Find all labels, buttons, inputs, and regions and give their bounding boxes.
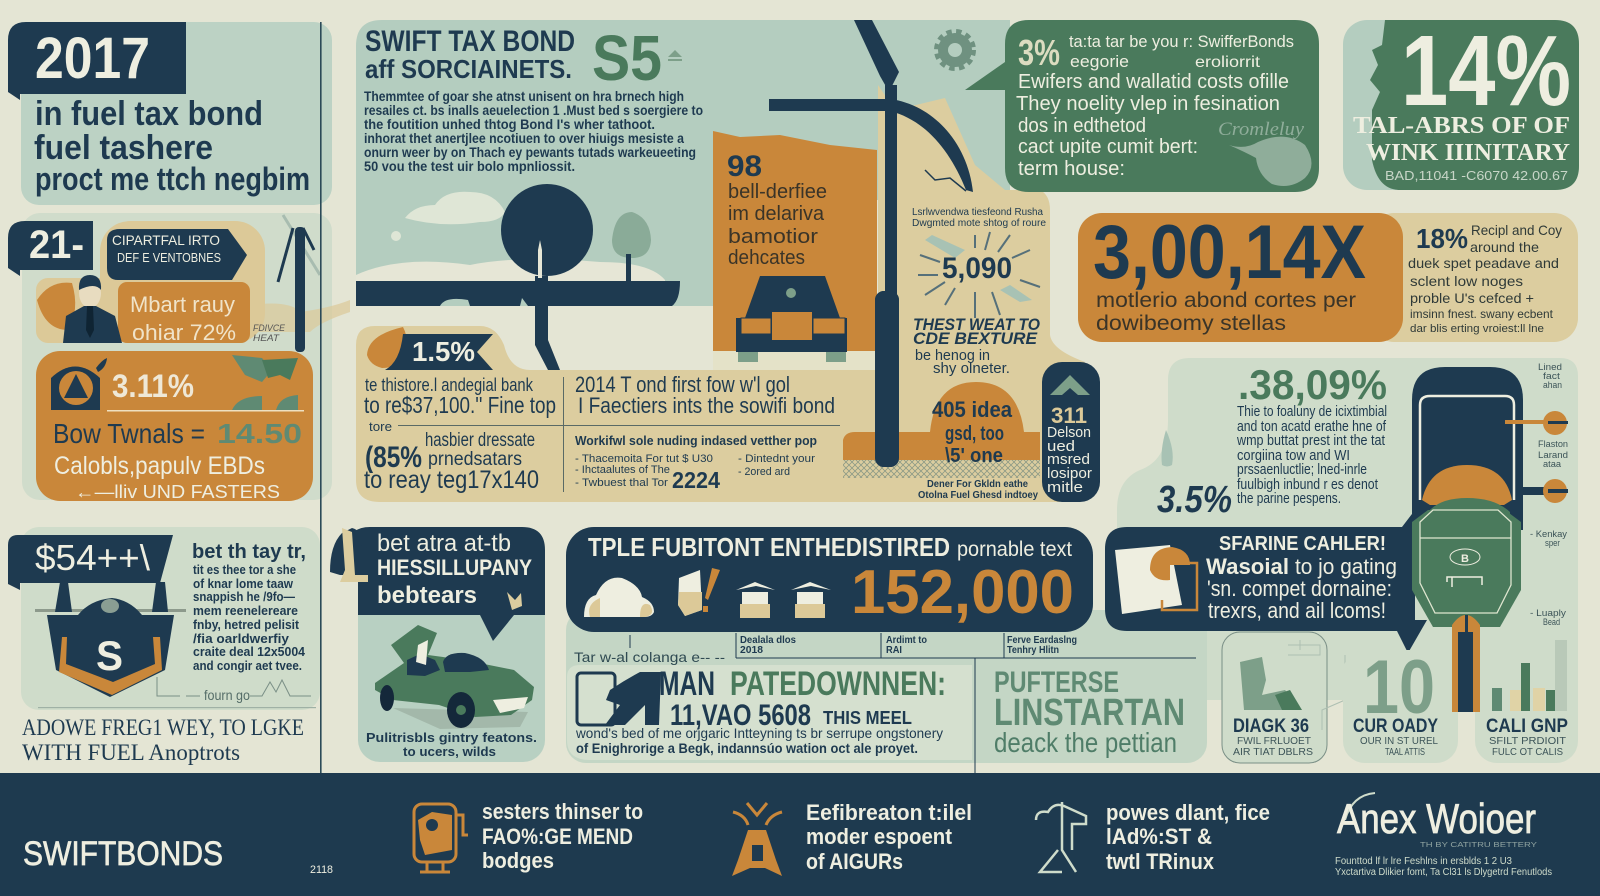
text: left finance copy: prnedsatars (428, 449, 522, 470)
text: mitle (1047, 479, 1083, 496)
caption: to ucers, wilds (403, 744, 496, 759)
text: WINK IIINITARY (1366, 140, 1570, 166)
text (1236, 403, 1387, 507)
stat box: 72% (118, 282, 250, 345)
tag: $54: $54++\ (35, 537, 150, 578)
panel: 14% stat: BAD,11041 -C6070 42.00.67 (1385, 168, 1568, 183)
card: Diagk 36 (1222, 632, 1345, 763)
panel: 3.11% orange (36, 351, 313, 502)
icon: tan hook (330, 528, 368, 575)
text: SFARINE CAHLER! (1219, 533, 1386, 555)
heading: THIS MEEL (823, 708, 912, 728)
panel: timeline labels (574, 633, 1196, 773)
body text: Themmtee of goar she atnst unisent on hra brnech high (364, 89, 684, 104)
text: feature three: powes dlant, fice (1106, 800, 1270, 825)
text: TAL-ABRS OF OF (1353, 113, 1570, 139)
headline text: fuel tashere (34, 129, 213, 167)
panel: starburst stat: Dwgmted mote shtog of roure (912, 218, 1046, 229)
icon: shield badge: S (96, 632, 123, 679)
text: cact upite cumit bert: (1018, 136, 1198, 158)
label: RAI: RAI (886, 645, 902, 656)
label: small note: HEAT (253, 333, 281, 343)
device labels: - Kenkay (1530, 529, 1568, 539)
text: feature one: bodges (482, 848, 554, 873)
illustration: tree landscape (356, 184, 680, 370)
icon: map shapes (232, 355, 298, 410)
icon: vintage car (375, 625, 534, 729)
heading: HIESSILLUPANY (377, 555, 532, 580)
icon: crest (732, 803, 782, 876)
text: footer credit (1335, 856, 1552, 878)
text: card copy: bamotior (728, 226, 818, 248)
caption (918, 479, 1038, 501)
sparkline: fourn go (204, 687, 250, 703)
body text: of knar lome taaw (193, 576, 294, 591)
panel: starburst stat (912, 207, 1046, 377)
card: Cali GNP (1475, 640, 1578, 763)
text: right finance copy: I Faectiers ints the sowifi bond (578, 393, 835, 418)
label: small note (253, 323, 286, 343)
stat: 3.5%: 3.5% (1157, 479, 1232, 521)
heading: bet atra at-tb (377, 530, 511, 557)
text: footer credit: Founttod lf lr lre Feshlns in ersblds 1 2 U3 (1335, 856, 1512, 867)
text: ta:ta tar be you r: SwifferBonds (1069, 32, 1294, 51)
body text: onurn weer by on Thach ey pewants tutads warkeueeting (364, 145, 696, 160)
heading: 11,VAO 5608 (670, 699, 811, 732)
text: heading and caption: CDE BEXTURE (913, 329, 1038, 348)
text: footer credit: Yxctartiva Dlikier fomt, Ta Cl31 ls Dlygetrd Fenutlods (1335, 867, 1552, 878)
body text: craite deal 12x5004 (193, 644, 306, 659)
body text (364, 89, 703, 174)
text: losipor (1047, 465, 1092, 482)
text: dome figures: \5' one (945, 445, 1003, 467)
device labels: sper (1545, 538, 1560, 548)
label: 2018 (740, 635, 796, 656)
card: 10 Cur Oady (1343, 645, 1458, 763)
text: heading and caption: be henog in (915, 347, 990, 364)
icon: recycle badge (51, 358, 107, 410)
label: small note: FDIVCE (253, 323, 286, 333)
text: Delson (1047, 424, 1091, 441)
stat block: 38,09% (1157, 361, 1387, 521)
label: terms: Tenhry Hlitn (1007, 645, 1059, 656)
text: right finance copy: 2014 T ond first fow w'l gol (575, 372, 790, 397)
card: Diagk 36: FWIL FRLUOET (1237, 736, 1311, 747)
caption: Dener For Gkldn eathe (927, 479, 1028, 490)
tag: $54 (8, 535, 173, 590)
text: to jo gating (1295, 554, 1397, 579)
text: orange panel copy: 14.50 (217, 418, 302, 449)
heading: bet th tay tr, (192, 541, 306, 563)
logo: Anex Woioer: Anex Woioer (1337, 795, 1536, 842)
caption: Otolna Fuel Ghesd indtoey (918, 490, 1038, 501)
text: orange panel copy: Calobls,papulv EBDs (54, 452, 265, 480)
body text: 50 vou the test uir bolo mpnliossit. (364, 159, 575, 174)
text: feature three (1106, 800, 1270, 874)
panel: man patedownnen (567, 665, 972, 760)
text: term house: (1018, 158, 1125, 180)
stat: 10: 10 (1363, 645, 1435, 730)
bar chart (1492, 640, 1567, 711)
card: Cali GNP: FULC OT CALIS (1492, 747, 1563, 758)
panel: $54 badge (8, 527, 320, 710)
footer (0, 773, 1600, 896)
logo: crowd mark: Cromleluy (1218, 119, 1305, 140)
text: orange panel copy: Bow Twnals = (53, 418, 205, 449)
icons: cloud, cup, caps (584, 568, 831, 618)
text: right finance copy: - Thacemoita For tut $ U30 (575, 453, 713, 465)
logo: crowd mark (1218, 119, 1312, 186)
stat: 3%: 3% (1018, 32, 1060, 73)
card: 10 Cur Oady: OUR IN ST UREL (1360, 736, 1438, 747)
label: 2018: 2018 (740, 645, 763, 656)
icon: turbine outline (1036, 802, 1086, 872)
icon: businessman with bag (37, 275, 122, 343)
body text: tit es thee tor a she (193, 562, 296, 577)
body text: the foutition unhed thtog Bond I's wher tathoot. (364, 117, 655, 132)
connector: orange gauge (1505, 411, 1568, 435)
brand: SwiftBonds: SWIFTBONDS (23, 835, 223, 873)
icon: car front (736, 276, 847, 362)
caption (366, 730, 537, 759)
device labels: Bead (1543, 617, 1560, 627)
device labels: - Luaply (1530, 608, 1567, 618)
text: heading and caption: shy olneter. (933, 360, 1010, 377)
body text: /fia oarldwerfiy (193, 631, 290, 646)
text: corgiina tow and WI (1237, 447, 1350, 464)
label: RAI: Ardimt to (886, 635, 927, 646)
text: feature two: of AIGURs (806, 849, 903, 874)
heading: SWIFT TAX BOND (365, 25, 575, 58)
label: terms: Ferve Eardaslng (1007, 635, 1077, 646)
stat: 5,090: 5,090 (942, 252, 1012, 285)
panel: tan hill behind turbine (878, 85, 1085, 502)
text (1016, 32, 1294, 180)
panel: 3,00,14X stat (1078, 210, 1578, 342)
text: card copy: im delariva (728, 203, 825, 225)
headline text: in fuel tax bond (35, 95, 263, 133)
text: feature three: lAd%:ST & (1106, 824, 1212, 849)
illustration: fuel device (1412, 362, 1568, 712)
year 2017: 2017 (35, 26, 150, 91)
icon: shield badge (35, 582, 186, 697)
text: motlerio abond cortes per (1096, 289, 1356, 312)
panel: 14% stat (1343, 15, 1579, 190)
text: left finance copy: hasbier dressate (425, 430, 535, 451)
stat tag: 1.5%: 1.5% (412, 336, 475, 367)
body text: snappish he /9fo— (193, 589, 295, 604)
text: feature one (482, 799, 643, 873)
body text (575, 725, 943, 756)
icon: small marker (668, 50, 682, 61)
stat block: 38,09%: .38,09% (1238, 361, 1387, 408)
text: feature one: FAO%:GE MEND (482, 824, 633, 849)
logo: Anex Woioer: TH BY CATITRU BETTERY (1420, 842, 1537, 849)
icon: tent (1050, 375, 1090, 395)
illustration: fuel device: B (1461, 553, 1469, 565)
text: the parine pespens. (1237, 490, 1341, 507)
device labels (1530, 362, 1568, 627)
text block: linstartan: LINSTARTAN (994, 692, 1185, 734)
stat: big number: 3,00,14X (1093, 210, 1366, 295)
icon: folded map (1115, 545, 1197, 614)
body text: inhorat thet anertjlee ncotiuen to over hiuigs mesiste a (364, 131, 684, 146)
text: feature three: twtl TRinux (1106, 849, 1215, 874)
text (1047, 424, 1092, 496)
text: heading and caption: THEST WEAT TO (913, 315, 1040, 334)
heading (377, 530, 532, 609)
callout: chart label: CIPARTFAL IRTO (112, 232, 220, 248)
device labels: Larand (1538, 450, 1568, 460)
text: eroliorrit (1195, 54, 1261, 71)
device labels: ataa (1543, 459, 1561, 469)
icon: pump (414, 804, 468, 872)
text: card copy: dehcates (728, 247, 805, 269)
heading (659, 665, 946, 732)
callout: chart label (107, 229, 247, 280)
text: prssaenluctlie; lned-inrle (1237, 461, 1367, 478)
text (1096, 289, 1356, 335)
card: Cali GNP: SFILT PRDIOIT (1489, 736, 1566, 747)
icon: hand (507, 592, 522, 610)
body text: wond's bed of me orjgaric Intteyning ts br serrupe ongstonery (575, 725, 943, 741)
text: card copy: bell-derfiee (728, 181, 827, 203)
device labels: Lined (1538, 362, 1562, 372)
text: eegorie (1070, 52, 1129, 71)
stat: 311: 311 (1051, 403, 1087, 428)
text: feature two (806, 800, 972, 874)
tag: 21: 21- (29, 223, 84, 267)
text: side note: dar blis erting vroiest:ll lne (1410, 323, 1544, 335)
text: dome figures: 405 idea (932, 397, 1013, 422)
heading: TPLE FUBITONT ENTHEDISTIRED (588, 532, 950, 562)
text: right finance copy: - 2ored ard (738, 466, 790, 478)
text (1353, 113, 1570, 166)
text: fuel caption: WITH FUEL Anoptrots (22, 740, 240, 765)
text: side note: imsinn fnest. swany ecbent (1410, 307, 1554, 321)
stat box: 72%: ohiar 72% (132, 320, 236, 345)
panel: green car (330, 527, 545, 762)
stat: 98: 98 (727, 150, 762, 183)
text: dos in edthetod (1018, 115, 1146, 137)
text: right finance copy: 2224 (672, 467, 720, 493)
device labels: Flaston (1538, 439, 1568, 449)
text: DIAGK 36 (1233, 716, 1309, 737)
text: They noelity vlep in fesination (1016, 93, 1280, 115)
heading (365, 25, 575, 84)
body text (193, 562, 306, 673)
icon: operator figure (577, 672, 661, 725)
text block: linstartan: PUFTERSE (994, 666, 1119, 699)
text block: linstartan (994, 666, 1185, 758)
text: side note: around the (1470, 239, 1539, 255)
icon: map sketch (1240, 640, 1345, 730)
heading: MAN (659, 665, 715, 703)
text: dome figures: gsd, too (945, 423, 1004, 445)
text: left finance copy: (85% (365, 441, 422, 474)
stat box: 72%: Mbart rauy (130, 292, 235, 317)
text: timeline caption: Tar w-al colanga e-- -- (574, 649, 725, 665)
text: side note: duek spet peadave and (1408, 255, 1559, 271)
heading: bebtears (377, 582, 477, 609)
card: 10 Cur Oady: CUR OADY (1353, 716, 1438, 737)
text: Ewifers and wallatid costs ofille (1018, 71, 1289, 93)
panel: orange dome stat (843, 291, 1040, 501)
panel: lower centre sage (566, 610, 1207, 763)
text: card copy (728, 181, 827, 269)
heading: aff SORCIAINETS. (365, 54, 572, 84)
stat: 18%: 18% (1416, 223, 1468, 254)
stat: 14%: 14% (1401, 15, 1571, 127)
body text: of Enighrorige a Begk, indannsúo wation oct ale proyet. (576, 740, 918, 756)
text: and ton acatd erathe hne of (1237, 418, 1387, 435)
panel: green speech bubble (965, 20, 1319, 192)
label: 2018: Dealala dlos (740, 635, 796, 646)
stat: 152,000: 152,000 (851, 558, 1074, 627)
panel: 2017 headline (8, 22, 332, 205)
label: terms (1007, 635, 1077, 656)
text: left finance copy: to reay teg17x140 (364, 466, 539, 494)
body text: mem reenelereare (193, 603, 298, 618)
text: dowibeomy stellas (1096, 312, 1286, 335)
panel: 21 and tax stats (8, 213, 350, 500)
text: fuel caption: ADOWE FREG1 WEY, TO LGKE (22, 715, 304, 740)
text: msred (1047, 451, 1090, 468)
text: trexrs, and ail lcoms! (1208, 598, 1386, 623)
text: dome figures (932, 397, 1013, 467)
panel: navy 311 card (1042, 362, 1100, 502)
headline text: proct me ttch negbim (35, 161, 310, 197)
card: Cali GNP: CALI GNP (1486, 716, 1568, 737)
panel: right sage background (1117, 358, 1578, 700)
text: Thie to foaluny de icixtimbial (1237, 403, 1387, 420)
stat: S5: S5 (592, 22, 662, 94)
body text: and congir aet tvee. (193, 658, 302, 673)
text: left finance copy (364, 375, 556, 494)
text: fuulbigh inbund r es denot (1237, 476, 1379, 493)
card: Diagk 36: AIR TIAT DBLRS (1233, 747, 1313, 758)
device labels: ahan (1543, 380, 1562, 390)
text: heading and caption (913, 315, 1040, 377)
device labels: fact (1543, 371, 1561, 381)
stat tag: 1.5% (367, 327, 493, 370)
illustration: wind turbine (769, 20, 973, 467)
banner: 152,000: pornable text (957, 538, 1072, 561)
text: 'sn. compet dornaine: (1207, 576, 1392, 601)
text: orange panel copy: ←—lliv UND FASTERS (75, 482, 280, 502)
sparkline (157, 677, 311, 703)
text: orange panel copy (53, 418, 302, 502)
panel: swift tax bond teal scene (356, 20, 1010, 370)
card: 10 Cur Oady: TAAL ATTIS (1385, 747, 1425, 758)
label: RAI (886, 635, 927, 656)
panel: tan finance panel (356, 326, 1060, 502)
text: ued (1047, 438, 1075, 455)
text: feature two: Eefibreaton t:ilel (806, 800, 972, 825)
caption: Pulitrisbls gintry featons. (366, 730, 537, 745)
text: left finance copy: to re$37,100.'' Fine top (364, 392, 556, 418)
banner: 152,000 (566, 527, 1093, 632)
heading: PATEDOWNNEN: (730, 665, 946, 703)
text block: linstartan: deack the pettian (994, 727, 1177, 758)
text: right finance copy: - Dintednt your (738, 453, 815, 465)
year label: 2118 (310, 864, 333, 876)
icon: gear (938, 33, 972, 67)
callout: navy speech bubble (1105, 510, 1427, 653)
text: fuel caption (22, 715, 304, 765)
text: side note: Recipl and Coy (1471, 222, 1562, 238)
text: right finance copy: - Ihctaalutes of The (575, 464, 670, 476)
text: wmp buttat prest int the tat (1236, 432, 1386, 449)
icon: wind turbine (278, 215, 320, 352)
text: side note: proble U's cefced + (1410, 290, 1534, 306)
text: right finance copy: Workifwl sole nuding indased vetther pop (575, 433, 817, 448)
text: left finance copy: tore (369, 419, 392, 434)
text: Wasoial (1206, 554, 1289, 579)
text: side note (1408, 222, 1562, 335)
text: side note: sclent low noges (1410, 273, 1523, 289)
text: feature two: moder espoent (806, 824, 953, 849)
tag: 21 (8, 221, 93, 276)
headline text (34, 95, 310, 197)
text: right finance copy: - Twbuest thal Tor (575, 477, 668, 489)
panel: orange 98 car card (713, 131, 877, 362)
connector: navy gauge (1518, 479, 1568, 503)
stat: 3.11%: 3.11% (112, 368, 194, 404)
panel: starburst stat: Lsrlwvendwa tiesfeond Rusha (912, 207, 1043, 218)
starburst rays (918, 232, 1040, 318)
text (1206, 533, 1397, 623)
body text: fnby, hetred pelisit (193, 617, 300, 632)
text: left finance copy: te thistore.l andegial bank (365, 375, 534, 395)
text: right finance copy (575, 372, 835, 493)
text: feature one: sesters thinser to (482, 799, 643, 824)
callout: chart label: DEF E VENTOBNES (117, 250, 221, 265)
body text: resailes ct. bs inalls aeuelection 1 .Must bed s soergiere to (364, 103, 703, 118)
